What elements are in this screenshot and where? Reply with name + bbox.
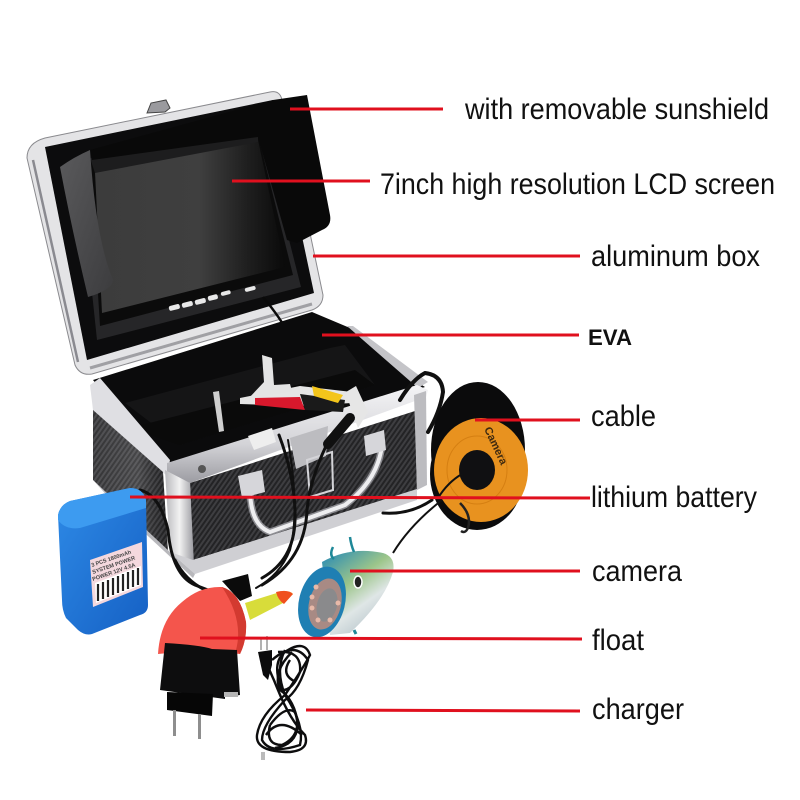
- tag: [248, 428, 276, 450]
- panel: underwater fish camera: [291, 537, 394, 642]
- spool label text: Camera: [481, 425, 510, 468]
- callout: lithium battery: lithium battery: [591, 481, 757, 514]
- LCD screen: [95, 140, 285, 313]
- panel: charger: [160, 636, 310, 760]
- battery barcode: [95, 566, 141, 603]
- case rim: [347, 326, 428, 388]
- rim screw: [198, 465, 206, 473]
- panel: lithium battery: 3 PCS 1800mAh: [91, 549, 133, 569]
- callout: charger: charger: [592, 693, 684, 726]
- callout: camera: camera: [592, 555, 682, 588]
- right corner: [414, 391, 427, 490]
- front corner: [165, 470, 194, 565]
- battery label: [90, 542, 143, 607]
- handle: [250, 445, 382, 532]
- sunshield: [90, 95, 330, 243]
- monitor bezel: [80, 133, 301, 340]
- callout: with removable sunshield: with removable sunshield: [464, 93, 769, 126]
- callout: EVA: EVA: [588, 325, 632, 350]
- bundled cables: [140, 373, 443, 590]
- case interior: [93, 312, 425, 470]
- panel: lithium battery: POWER 12V 4.5A: [92, 562, 136, 583]
- fish eye: [354, 576, 362, 588]
- panel: lithium battery: SYSTEM POWER: [92, 556, 136, 576]
- carbon left panel: [93, 410, 168, 552]
- AV connectors: [240, 386, 352, 406]
- icon: lid latch: [147, 100, 170, 113]
- case latch: [290, 426, 328, 469]
- bottom rim: [170, 489, 417, 574]
- callout: float: float: [592, 624, 645, 657]
- callout: aluminum box: aluminum box: [591, 240, 760, 273]
- carbon front panel: [190, 411, 417, 560]
- panel: cable spool with camera sticker: [393, 382, 528, 553]
- panel: aluminum case base: [90, 312, 443, 601]
- callout: cable: cable: [591, 400, 656, 433]
- monitor cable: [263, 297, 325, 355]
- panel: float: [158, 587, 293, 654]
- panel: lithium battery: [58, 488, 148, 634]
- USB cable bundle: [257, 646, 310, 752]
- panel: open lid with LCD monitor: [27, 92, 330, 374]
- monitor buttons: [168, 286, 256, 311]
